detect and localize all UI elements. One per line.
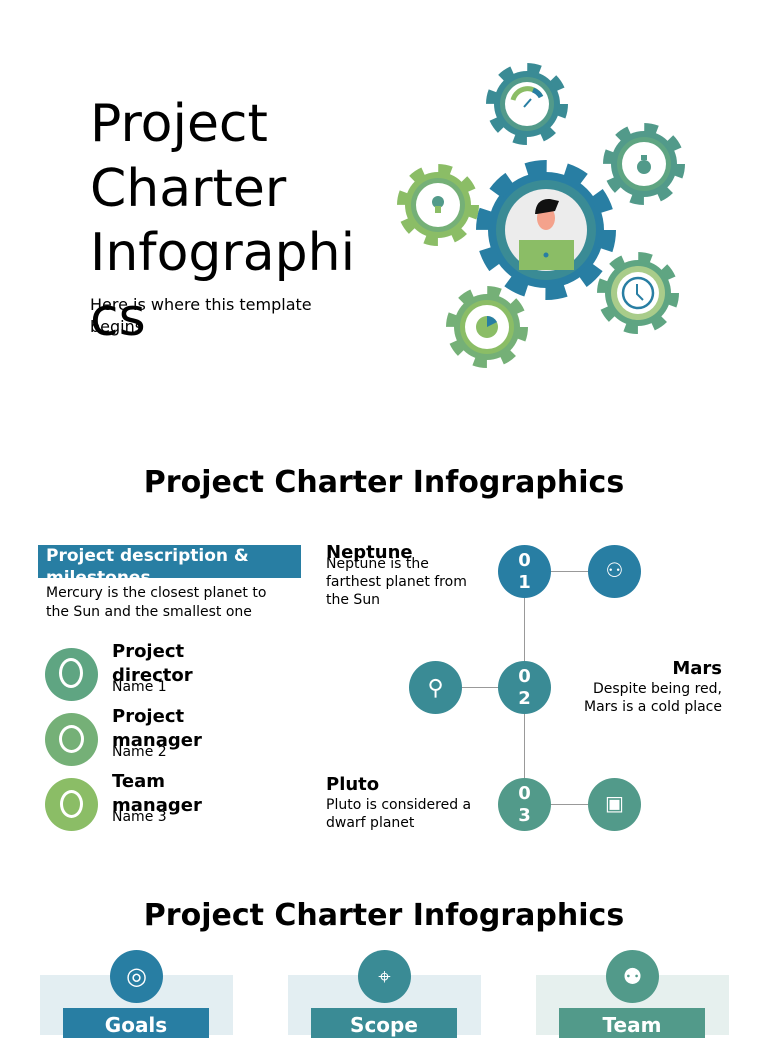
step 03: 3 xyxy=(518,805,531,826)
icon: team xyxy=(588,545,641,598)
text: description: Mercury is the closest planet to the Sun and the smallest one xyxy=(46,585,266,620)
text: Neptune: Neptune is the farthest planet from the Sun xyxy=(326,556,467,608)
title: Project xyxy=(90,94,268,154)
text: Pluto xyxy=(326,774,471,831)
gear: lightbulb xyxy=(402,169,474,241)
member: director xyxy=(45,641,193,701)
card: goals: ◎ xyxy=(126,963,147,990)
gear: center person xyxy=(484,168,608,292)
icon: search person xyxy=(409,661,462,714)
text: Goals xyxy=(105,1013,167,1037)
member: director: Project director xyxy=(112,641,193,686)
text: Scope xyxy=(350,1013,418,1037)
text: Team xyxy=(603,1013,661,1037)
gear: top gauge xyxy=(491,68,563,140)
text: Mars: Despite being red, Mars is a cold place xyxy=(584,681,722,715)
step 01: 0 xyxy=(518,550,531,571)
card: goals xyxy=(40,950,233,1038)
illustration: gears xyxy=(397,63,685,368)
card: scope: ⌖ xyxy=(378,964,391,989)
text: Mars: Mars xyxy=(672,658,722,679)
member: team manager xyxy=(45,771,202,831)
member: director: Name 1 xyxy=(112,679,167,695)
step 01 xyxy=(498,545,551,598)
member: team manager: Name 3 xyxy=(112,809,167,825)
step 02 xyxy=(498,661,551,714)
text: Mars xyxy=(584,658,722,715)
title xyxy=(90,94,355,348)
title: Infographi xyxy=(90,223,355,283)
timeline xyxy=(409,545,641,831)
step 02: 0 xyxy=(518,666,531,687)
gear: pie xyxy=(451,291,523,363)
member: manager: Name 2 xyxy=(112,744,167,760)
icon: presentation xyxy=(588,778,641,831)
text: Pluto: Pluto is considered a dwarf planet xyxy=(326,797,471,831)
step 03: 0 xyxy=(518,783,531,804)
step 03 xyxy=(498,778,551,831)
icon: presentation: ▣ xyxy=(605,793,624,815)
gear: clock xyxy=(602,257,674,329)
card: scope xyxy=(288,950,481,1038)
step 01: 1 xyxy=(518,572,531,593)
icon: search person: ⚲ xyxy=(427,675,444,700)
text: Neptune: Neptune xyxy=(326,542,413,563)
heading: section 2: Project Charter Infographics xyxy=(144,898,624,933)
member: manager xyxy=(45,706,202,766)
title: Charter xyxy=(90,158,286,218)
step 02: 2 xyxy=(518,688,531,709)
title: cs xyxy=(90,288,146,348)
card: team: ⚉ xyxy=(623,964,642,989)
subtitle: Here is where this template begins xyxy=(90,295,312,336)
member: manager: Project manager xyxy=(112,706,202,751)
icon: team: ⚇ xyxy=(606,560,623,582)
card: team xyxy=(536,950,729,1038)
text: Pluto: Pluto xyxy=(326,774,379,795)
member: team manager: Team manager xyxy=(112,771,202,816)
heading: section 1: Project Charter Infographics xyxy=(144,465,624,500)
gear: money xyxy=(608,128,680,200)
team list xyxy=(45,641,202,831)
